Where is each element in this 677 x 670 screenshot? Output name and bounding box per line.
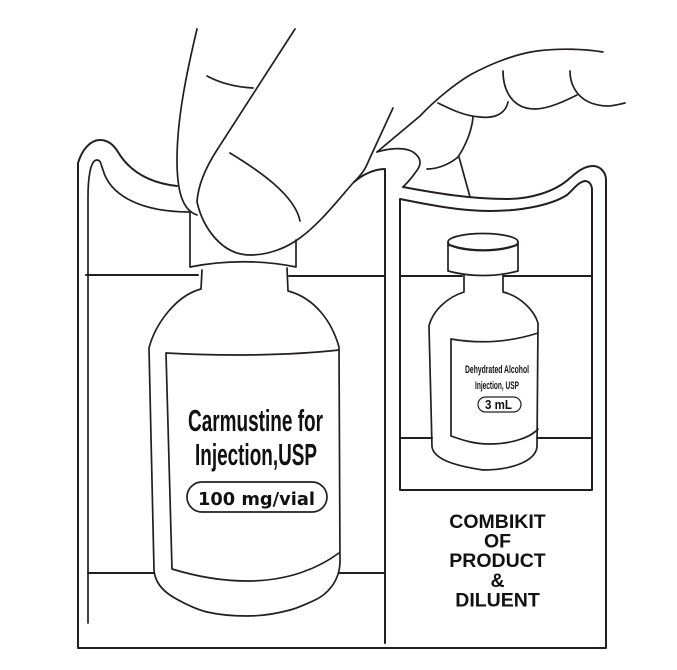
vial label outline [166,350,339,581]
caption: combikit of product and diluent: COMBIKIT [449,511,546,533]
dose pill: 100 mg/vial [198,489,315,510]
volume pill [478,397,521,412]
volume pill: 3 mL [485,398,512,412]
drug name: Carmustine for [188,403,323,438]
left compartment of tray [86,160,385,643]
drug name [188,403,323,472]
small vial body [429,275,538,470]
diluent name: Dehydrated Alcohol [465,364,529,376]
caption: combikit of product and diluent: PRODUCT [449,550,546,572]
drug name: Injection,USP [195,437,317,472]
diluent name [465,364,529,392]
caption: combikit of product and diluent: DILUENT [455,590,540,612]
right compartment of tray [400,181,592,490]
tray outer outline [78,140,606,648]
caption: combikit of product and diluent: & [490,570,505,592]
index finger [377,49,625,197]
caption: combikit of product and diluent [449,511,546,612]
small vial: diluent [429,234,538,470]
large vial: carmustine [149,212,340,616]
dose pill [187,482,327,512]
vial cap and body [149,212,340,616]
small vial cap [448,234,518,276]
diluent name: Injection, USP [475,380,519,392]
caption: combikit of product and diluent: OF [484,530,511,552]
small vial label outline [451,333,538,444]
thumb [177,29,393,255]
